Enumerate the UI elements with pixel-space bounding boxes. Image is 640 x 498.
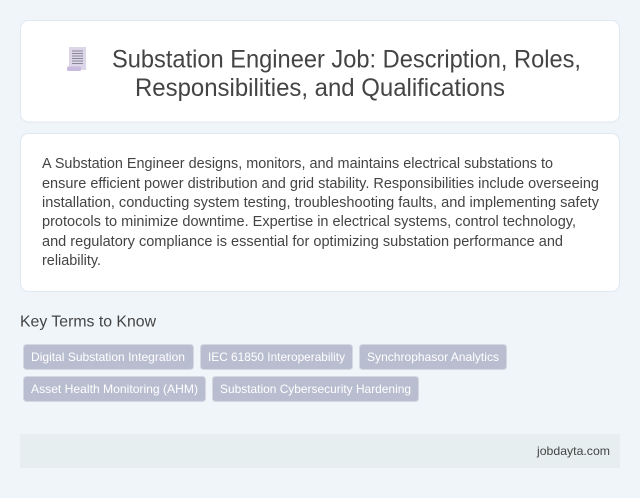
icon: document scroll bbox=[67, 47, 86, 71]
text block: description: reliability. bbox=[42, 253, 101, 269]
title: Substation Engineer Job: Description, Roles, bbox=[112, 46, 581, 74]
panel: title card bbox=[20, 20, 620, 122]
tag: Asset Health Monitoring (AHM) bbox=[24, 376, 206, 402]
text block: description: A Substation Engineer designs, monitors, and maintains electrical substations to bbox=[42, 156, 553, 172]
text block: description: and regulatory compliance is essential for optimizing substation performance and bbox=[42, 234, 563, 250]
footer: jobdayta.com bbox=[536, 444, 610, 458]
tag: IEC 61850 Interoperability bbox=[200, 344, 352, 370]
tag: Substation Cybersecurity Hardening bbox=[212, 376, 418, 402]
footer bbox=[20, 434, 620, 468]
text block: description: installation, conducting system testing, troubleshooting faults, and implementing safety bbox=[42, 195, 600, 211]
text block: description bbox=[42, 156, 600, 269]
tag: Asset Health Monitoring (AHM): Asset Health Monitoring (AHM) bbox=[31, 382, 198, 396]
text block: description: protocols to minimize downtime. Expertise in electrical systems, control technology, bbox=[42, 214, 576, 230]
title: Responsibilities, and Qualifications bbox=[135, 74, 505, 102]
text block: description: ensure efficient power distribution and grid stability. Responsibilities include overseeing bbox=[42, 176, 599, 192]
tag: Synchrophasor Analytics: Synchrophasor Analytics bbox=[367, 350, 499, 364]
heading: key terms: Key Terms to Know bbox=[20, 314, 156, 330]
panel: description bbox=[20, 134, 620, 292]
title bbox=[112, 46, 581, 102]
tag: Digital Substation Integration: Digital Substation Integration bbox=[31, 350, 185, 364]
tag: IEC 61850 Interoperability: IEC 61850 Interoperability bbox=[208, 350, 345, 364]
tag: Synchrophasor Analytics bbox=[360, 344, 506, 370]
tag: Digital Substation Integration bbox=[24, 344, 194, 370]
tag: Substation Cybersecurity Hardening: Substation Cybersecurity Hardening bbox=[220, 382, 411, 396]
